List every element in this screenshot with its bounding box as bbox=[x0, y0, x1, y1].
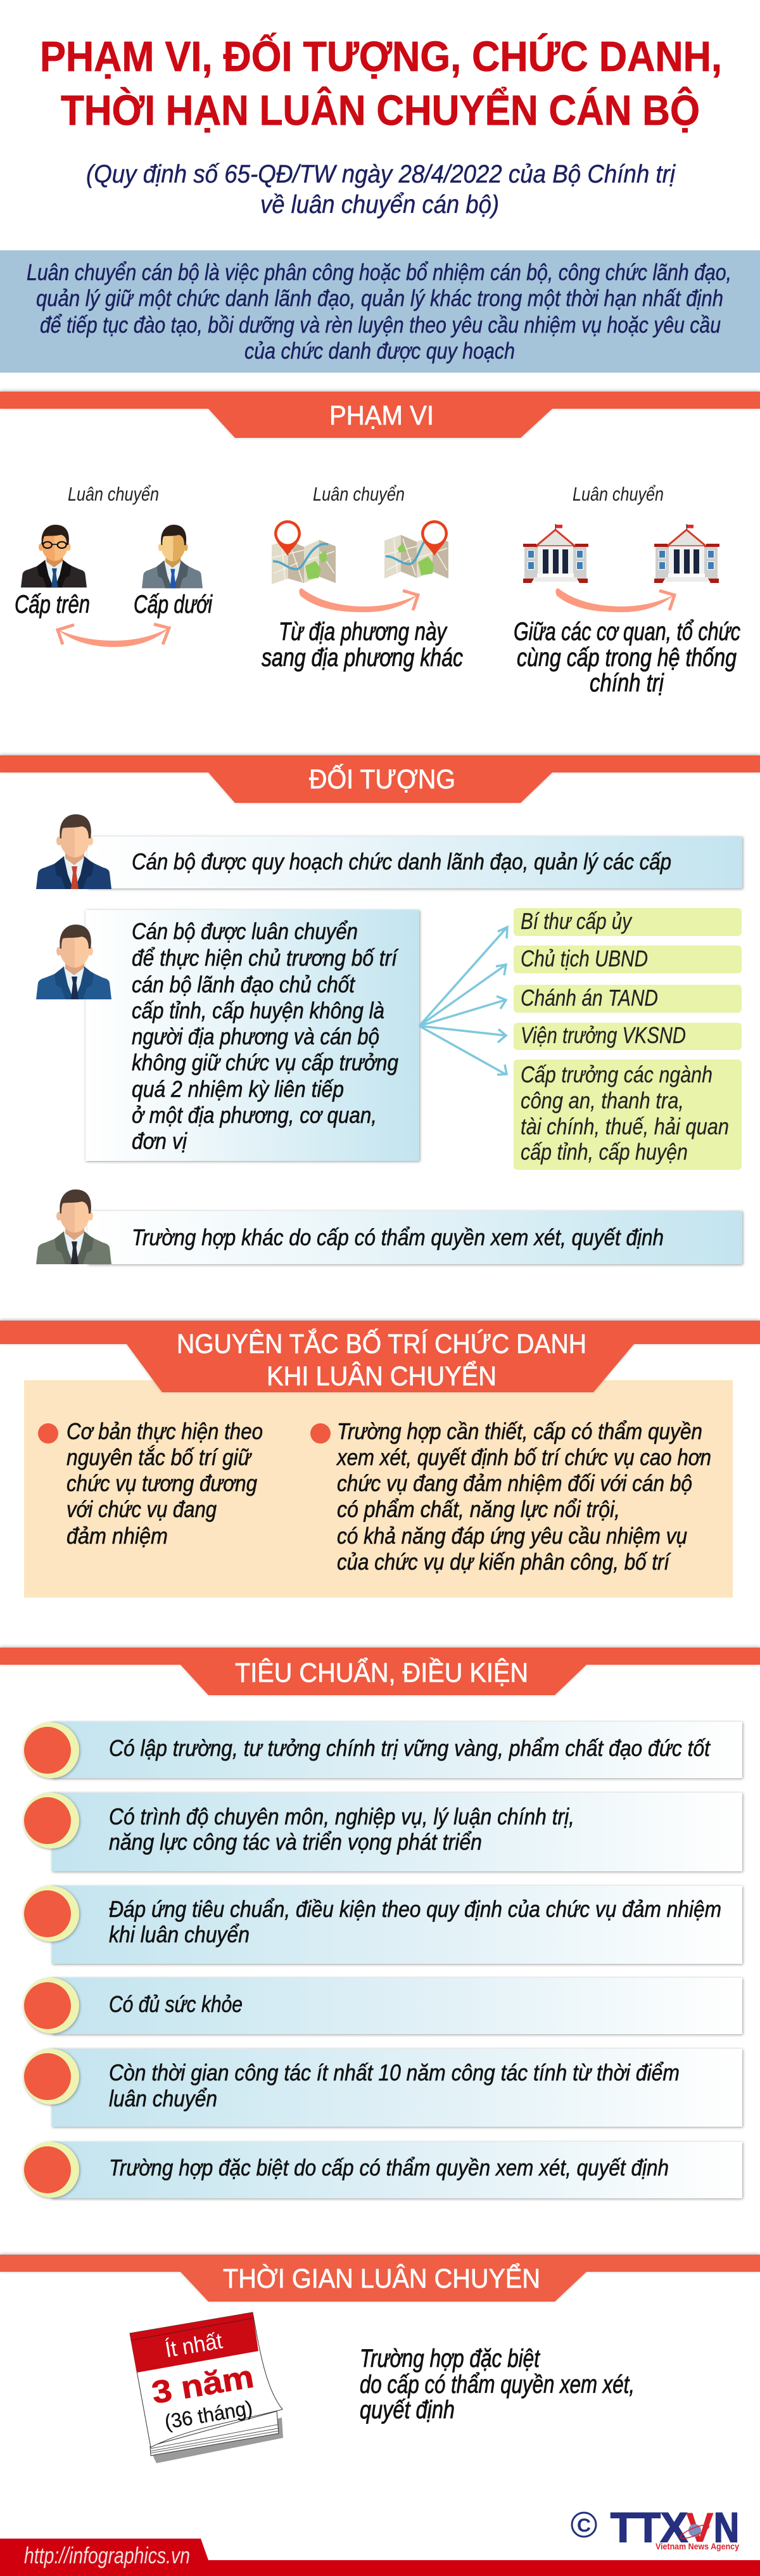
position: people's committee chair bbox=[514, 945, 742, 973]
subtitle bbox=[86, 160, 676, 219]
heading: Phạm vi bbox=[0, 392, 760, 438]
bullet bbox=[38, 1423, 58, 1444]
text: không giữ chức vụ cấp trưởng bbox=[132, 1049, 398, 1075]
heading: Nguyên tắc bbox=[0, 1321, 760, 1392]
text: principle two: có khả năng đáp ứng yêu cầu nhiệm vụ bbox=[337, 1523, 687, 1549]
text: principle one: chức vụ tương đương bbox=[66, 1470, 257, 1496]
criterion 6: Trường hợp đặc biệt do cấp có thẩm quyền xem xét, quyết định bbox=[109, 2155, 669, 2181]
text: đơn vị bbox=[132, 1128, 187, 1154]
footer bbox=[0, 2539, 760, 2576]
text: special case: Trường hợp đặc biệt bbox=[360, 2345, 540, 2373]
text bbox=[132, 918, 399, 1154]
position: people's committee chair: Chủ tịch UBND bbox=[521, 945, 648, 971]
panel: scope between agencies bbox=[514, 483, 740, 697]
text: special case: quyết định bbox=[360, 2396, 455, 2424]
criterion 3: khi luân chuyển bbox=[109, 1921, 250, 1947]
icon: official bbox=[36, 814, 111, 889]
label: between agencies bbox=[514, 618, 740, 697]
text: principle two: có phẩm chất, năng lực nổi trội, bbox=[337, 1496, 620, 1522]
text: để thực hiện chủ trương bố trí bbox=[132, 945, 399, 971]
position: party secretary bbox=[514, 908, 742, 936]
icon: superior bbox=[21, 525, 87, 587]
heading: Thời gian bbox=[0, 2255, 760, 2302]
criterion 2: năng lực công tác và triển vọng phát triển bbox=[109, 1829, 482, 1855]
label: superior: Cấp trên bbox=[15, 591, 90, 618]
icon: map origin bbox=[272, 520, 336, 584]
heading: Thời gian: THỜI GIAN LUÂN CHUYỂN bbox=[223, 2263, 540, 2294]
icon: subordinate bbox=[142, 525, 203, 588]
label: between localities: sang địa phương khác bbox=[262, 644, 463, 672]
position: sector heads bbox=[514, 1060, 742, 1170]
text: quá 2 nhiệm kỳ liên tiếp bbox=[132, 1076, 344, 1102]
title bbox=[40, 32, 722, 134]
criterion 4 bbox=[23, 1978, 742, 2034]
logo: TTXVN bbox=[572, 2504, 739, 2551]
icon: building origin bbox=[523, 524, 588, 583]
label: between localities bbox=[262, 618, 463, 672]
panel: scope between localities bbox=[262, 483, 463, 672]
text: principle one: với chức vụ đang bbox=[66, 1496, 217, 1522]
text: principle two: xem xét, quyết định bố trí chức vụ cao hơn bbox=[336, 1444, 711, 1470]
title: THỜI HẠN LUÂN CHUYỂN CÁN BỘ bbox=[61, 87, 700, 134]
subtitle: về luân chuyển cán bộ) bbox=[260, 191, 499, 219]
criterion 6 bbox=[23, 2142, 742, 2198]
criterion 2 bbox=[23, 1793, 742, 1871]
text: Cán bộ được quy hoạch chức danh lãnh đạo, quản lý các cấp bbox=[132, 849, 671, 875]
text: ở một địa phương, cơ quan, bbox=[132, 1102, 377, 1128]
label: rotation: Luân chuyển bbox=[68, 483, 159, 505]
panel: planned officials bbox=[36, 814, 742, 889]
logo: TTXVN: TTX bbox=[611, 2504, 688, 2551]
icon: official bbox=[36, 1189, 111, 1264]
criterion 2: Có trình độ chuyên môn, nghiệp vụ, lý luận chính trị, bbox=[109, 1804, 574, 1829]
arrow: one-way bbox=[299, 588, 419, 612]
icon: building destination bbox=[654, 524, 719, 583]
subtitle: (Quy định số 65-QĐ/TW ngày 28/4/2022 của Bộ Chính trị bbox=[86, 160, 676, 188]
position: party secretary: Bí thư cấp ủy bbox=[521, 908, 633, 934]
panel: positions list bbox=[514, 908, 742, 1170]
heading: Tiêu chuẩn: TIÊU CHUẨN, ĐIỀU KIỆN bbox=[235, 1657, 528, 1688]
text: principle one: nguyên tắc bố trí giữ bbox=[66, 1444, 252, 1470]
criterion 5 bbox=[23, 2049, 742, 2127]
text: người địa phương và cán bộ bbox=[132, 1023, 379, 1049]
arrows: fan to positions bbox=[419, 927, 507, 1075]
position: chief procurator: Viện trưởng VKSND bbox=[521, 1022, 686, 1048]
arrow: two-way bbox=[57, 624, 170, 647]
criterion 3 bbox=[23, 1886, 742, 1964]
label: rotation: Luân chuyển bbox=[313, 483, 405, 505]
calendar: 36 months: (36 tháng) bbox=[163, 2396, 254, 2433]
panel: other cases bbox=[36, 1189, 742, 1264]
heading: Phạm vi: PHẠM VI bbox=[329, 400, 434, 431]
position: chief judge bbox=[514, 985, 742, 1013]
text: principle two bbox=[336, 1418, 711, 1575]
text: principle two: Trường hợp cần thiết, cấp có thẩm quyền bbox=[337, 1418, 702, 1444]
label: rotation: Luân chuyển bbox=[573, 483, 664, 505]
bullet bbox=[310, 1423, 331, 1444]
heading: Nguyên tắc: NGUYÊN TẮC BỐ TRÍ CHỨC DANH bbox=[177, 1328, 586, 1359]
text: principle one: đảm nhiệm bbox=[66, 1523, 168, 1549]
arrow: one-way bbox=[555, 588, 675, 612]
panel: definition bbox=[0, 250, 760, 373]
icon: official bbox=[36, 925, 111, 999]
logo: TTXVN: Vietnam News Agency bbox=[656, 2541, 739, 2551]
text: principle two: của chức vụ dự kiến phân công, bố trí bbox=[337, 1549, 671, 1575]
heading: Đối tượng bbox=[0, 755, 760, 803]
criterion 5: Còn thời gian công tác ít nhất 10 năm công tác tính từ thời điểm bbox=[109, 2060, 680, 2086]
position: sector heads: Cấp trưởng các ngành bbox=[521, 1061, 712, 1087]
text: cấp tỉnh, cấp huyện không là bbox=[132, 997, 384, 1023]
calendar: at least: Ít nhất bbox=[163, 2328, 224, 2362]
panel: scope superior and subordinate bbox=[15, 483, 213, 647]
label: between localities: Từ địa phương này bbox=[279, 618, 448, 646]
criterion 5: luân chuyển bbox=[109, 2086, 217, 2111]
logo: TTXVN: V bbox=[686, 2504, 714, 2551]
logo: TTXVN: C bbox=[577, 2515, 591, 2536]
icon: map destination bbox=[384, 520, 448, 579]
text: principle one: Cơ bản thực hiện theo bbox=[66, 1418, 263, 1444]
position: sector heads: tài chính, thuế, hải quan bbox=[521, 1113, 729, 1139]
text: Trường hợp khác do cấp có thẩm quyền xem xét, quyết định bbox=[132, 1224, 664, 1250]
calendar: 3 years: 3 năm bbox=[149, 2359, 256, 2411]
position: sector heads: công an, thanh tra, bbox=[521, 1087, 684, 1113]
position: chief judge: Chánh án TAND bbox=[521, 985, 658, 1011]
footer: http://infographics.vn bbox=[24, 2542, 190, 2568]
text: cán bộ lãnh đạo chủ chốt bbox=[132, 971, 356, 997]
position: sector heads: cấp tỉnh, cấp huyện bbox=[521, 1139, 688, 1165]
heading: Đối tượng: ĐỐI TƯỢNG bbox=[309, 764, 455, 795]
criterion 4: Có đủ sức khỏe bbox=[109, 1991, 243, 2017]
heading: Nguyên tắc: KHI LUÂN CHUYỂN bbox=[267, 1361, 497, 1392]
panel: definition: của chức danh được quy hoạch bbox=[244, 338, 515, 364]
text: principle one bbox=[66, 1418, 263, 1549]
panel: principles bbox=[24, 1380, 733, 1598]
text: special case: do cấp có thẩm quyền xem xét, bbox=[360, 2371, 635, 2399]
heading: Tiêu chuẩn bbox=[0, 1648, 760, 1695]
criterion 1 bbox=[23, 1722, 742, 1778]
icon: calendar bbox=[130, 2312, 283, 2463]
logo: TTXVN: N bbox=[714, 2504, 739, 2551]
text: principle two: chức vụ đang đảm nhiệm đối với cán bộ bbox=[337, 1470, 692, 1496]
text: Cán bộ được luân chuyển bbox=[132, 918, 358, 944]
text: special case bbox=[360, 2345, 635, 2424]
panel: rotated officials bbox=[36, 910, 419, 1161]
label: between agencies: chính trị bbox=[590, 669, 664, 697]
label: subordinate: Cấp dưới bbox=[134, 591, 213, 618]
